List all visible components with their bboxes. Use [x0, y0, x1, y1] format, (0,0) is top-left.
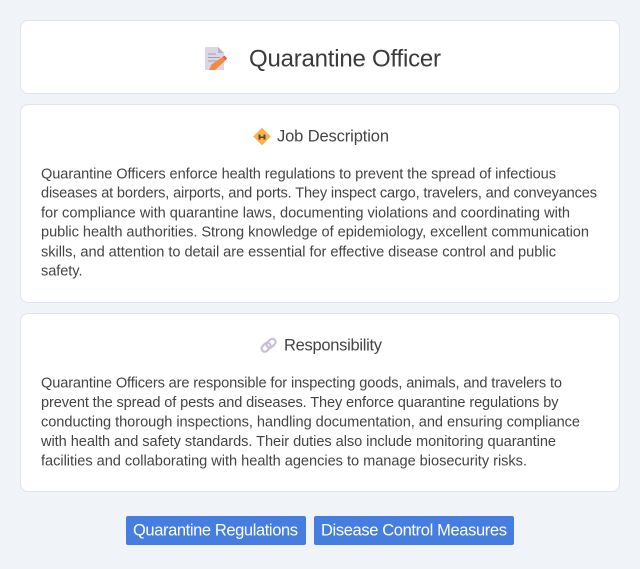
heading: job description: Job Description — [277, 128, 389, 146]
text block: job description: safety. — [41, 264, 82, 280]
icon: orange diamond road sign — [254, 128, 270, 144]
text block: responsibility: with health and safety standards. Their duties also include monitoring quarantine — [40, 434, 556, 450]
tag label: Disease Control Measures: Disease Control Measures — [321, 522, 507, 540]
tag button: Disease Control Measures — [314, 516, 514, 545]
icon: chain link — [260, 337, 277, 353]
text block: job description: diseases at borders, airports, and ports. They inspect cargo, travelers, and conveyances — [41, 186, 597, 202]
text block: responsibility: prevent the spread of pests and diseases. They enforce quarantine regulations by — [41, 395, 559, 411]
text block: responsibility — [40, 376, 580, 470]
text block: job description: public health authorities. Strong knowledge of epidemiology, excellent communication — [41, 224, 589, 240]
text block: responsibility: conducting thorough inspections, handling documentation, and ensuring compliance — [41, 414, 580, 430]
panel: title card — [20, 20, 620, 94]
text block: job description: Quarantine Officers enforce health regulations to prevent the spread of infectious — [41, 166, 556, 182]
text block: responsibility: facilities and collaborating with health agencies to manage biosecurity risks. — [41, 454, 527, 470]
text block: responsibility: Quarantine Officers are responsible for inspecting goods, animals, and travelers to — [41, 376, 562, 392]
text block: job description — [41, 166, 597, 280]
panel: responsibility card — [20, 313, 620, 492]
tag label: Quarantine Regulations: Quarantine Regulations — [133, 522, 298, 540]
icon: document with pencil — [205, 47, 227, 70]
tag button: Quarantine Regulations — [126, 516, 306, 545]
heading: responsibility: Responsibility — [284, 336, 383, 354]
panel: job description card — [20, 104, 620, 303]
text block: job description: for compliance with quarantine laws, documenting violations and coordinating with — [41, 206, 570, 222]
text block: job description: skills, and attention to detail are essential for effective disease control and public — [41, 244, 556, 260]
title: Quarantine Officer — [249, 46, 441, 72]
